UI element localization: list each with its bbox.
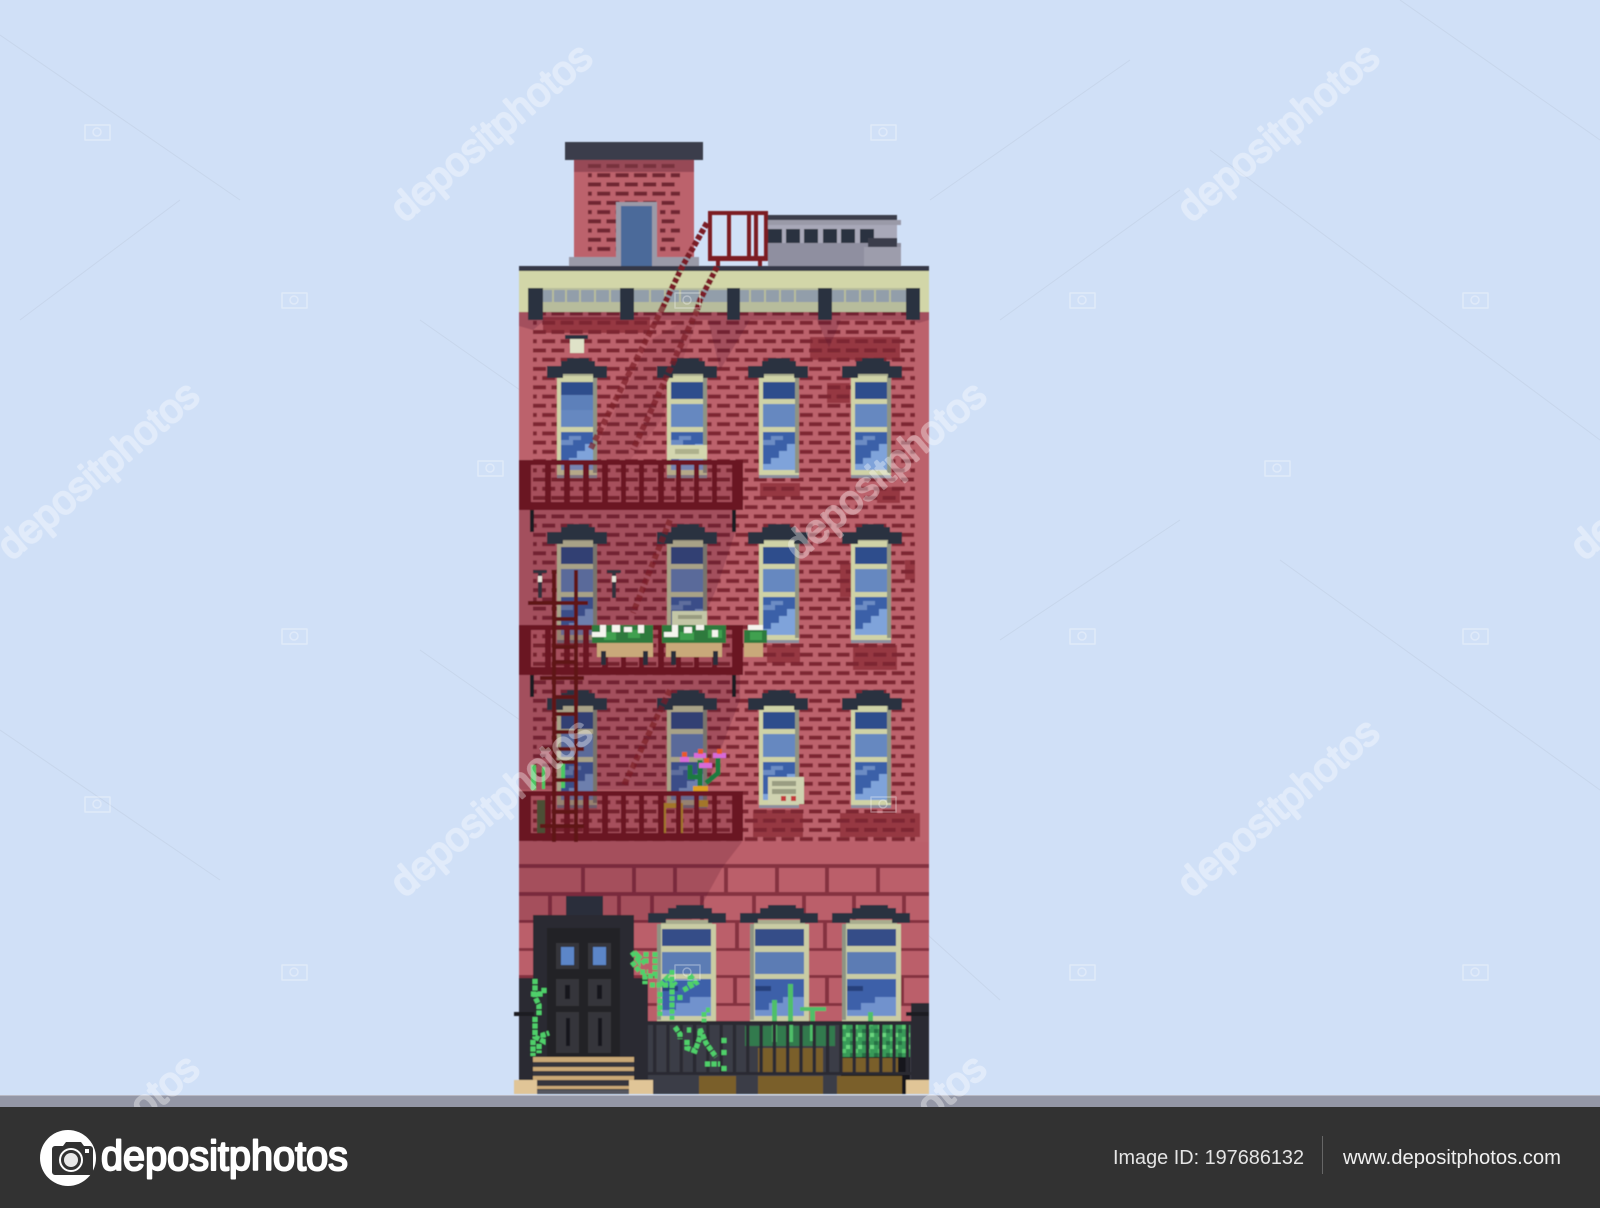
ground floor windows — [657, 920, 901, 1022]
rooftop mechanical structure — [768, 215, 901, 266]
front door — [533, 896, 634, 1058]
depositphotos diagonal watermarks: depositphotos — [382, 710, 601, 905]
climbing vines — [531, 952, 724, 1072]
fire escape balconies — [519, 460, 743, 841]
entry steps — [533, 1057, 634, 1094]
window planters — [592, 625, 767, 665]
garden railing and planters — [648, 984, 911, 1094]
air conditioners — [667, 445, 804, 804]
stone base wall — [519, 842, 929, 1042]
balcony stool — [662, 800, 708, 837]
small camera watermarks — [85, 125, 1488, 980]
roof slab and cornice — [519, 266, 929, 320]
icon: camera logo — [40, 1130, 96, 1186]
potted plant on lower balcony — [531, 762, 565, 838]
rooftop stair bulkhead — [565, 142, 703, 266]
fire escape ladder — [528, 570, 588, 853]
street ground strip — [0, 1095, 1600, 1108]
brick wall — [519, 312, 929, 842]
fire escape stairs — [590, 223, 717, 787]
wall sconces — [533, 570, 621, 598]
flower pot plant — [680, 749, 726, 791]
depositphotos diagonal watermarks: depositphotos — [776, 373, 995, 568]
depositphotos diagonal watermarks: depositphotos — [1169, 35, 1388, 230]
rooftop railing — [708, 211, 768, 266]
wall shadows — [519, 312, 929, 900]
window lintels — [547, 358, 902, 710]
wall lamp — [565, 335, 588, 353]
depositphotos diagonal watermarks: depositphotos — [1169, 710, 1388, 905]
website url: www.depositphotos.com — [1342, 1147, 1561, 1169]
building — [514, 142, 929, 1094]
ground floor lintels — [648, 905, 910, 923]
depositphotos diagonal watermarks: depositphotos — [382, 35, 601, 230]
footer bar — [0, 1107, 1600, 1208]
stone plinths — [514, 1080, 929, 1094]
image id: Image ID: 197686132 — [1113, 1147, 1304, 1169]
stoop posts — [514, 978, 929, 1080]
upper windows — [557, 372, 891, 809]
logo wordmark: depositphotos — [101, 1132, 348, 1179]
